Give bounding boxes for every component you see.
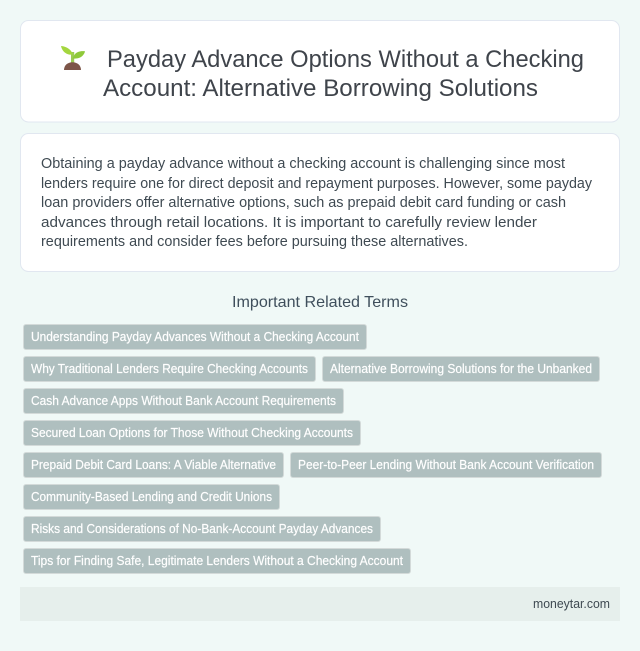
tag 6: Prepaid Debit Card Loans: A Viable Alternative: [31, 458, 276, 472]
text block: summary paragraph: requirements and consider fees before pursuing these alternatives.: [41, 234, 468, 250]
tag 4: Cash Advance Apps Without Bank Account Requirements: [31, 394, 336, 408]
text block: summary paragraph: advances through retail locations. It is important to carefully review lender: [41, 215, 537, 231]
tag 5: Secured Loan Options for Those Without Checking Accounts: [31, 426, 353, 440]
footer: moneytar.com: [533, 597, 610, 611]
tag 8: Community-Based Lending and Credit Unions: [31, 490, 272, 504]
tag 1: Understanding Payday Advances Without a Checking Account: [31, 330, 359, 344]
footer: [20, 587, 620, 621]
tag 2: [24, 356, 316, 382]
text block: summary paragraph: lenders require one for direct deposit and repayment purposes. However, some payday: [41, 176, 593, 192]
tag 9: [24, 516, 380, 542]
text block: summary paragraph: Obtaining a payday advance without a checking account is challenging since most: [41, 156, 565, 172]
tag 1: [24, 324, 366, 350]
tag 5: [24, 420, 360, 446]
tag 3: [322, 356, 600, 382]
tag 10: Tips for Finding Safe, Legitimate Lenders Without a Checking Account: [31, 554, 403, 568]
heading: title text: Payday Advance Options Without a Checking: [107, 46, 584, 73]
tag 9: Risks and Considerations of No-Bank-Account Payday Advances: [31, 522, 373, 536]
tag 7: [290, 452, 602, 478]
tag 3: Alternative Borrowing Solutions for the Unbanked: [330, 362, 592, 376]
text block: summary paragraph: loan providers offer alternative options, such as prepaid debit card funding or cash: [41, 195, 566, 211]
tag 4: [24, 388, 344, 414]
heading: title text: [103, 46, 584, 102]
heading: title text: Account: Alternative Borrowing Solutions: [103, 75, 538, 102]
icon: seedling: [61, 46, 85, 70]
tag 7: Peer-to-Peer Lending Without Bank Account Verification: [298, 458, 594, 472]
heading: related terms: Important Related Terms: [232, 294, 408, 311]
tag 10: [24, 548, 410, 574]
text block: summary paragraph: [41, 156, 593, 250]
panel: summary: [20, 134, 620, 272]
tags: related terms: [24, 324, 602, 574]
tag 2: Why Traditional Lenders Require Checking Accounts: [31, 362, 308, 376]
panel: title: [20, 20, 620, 122]
tag 8: [24, 484, 280, 510]
tag 6: [24, 452, 284, 478]
